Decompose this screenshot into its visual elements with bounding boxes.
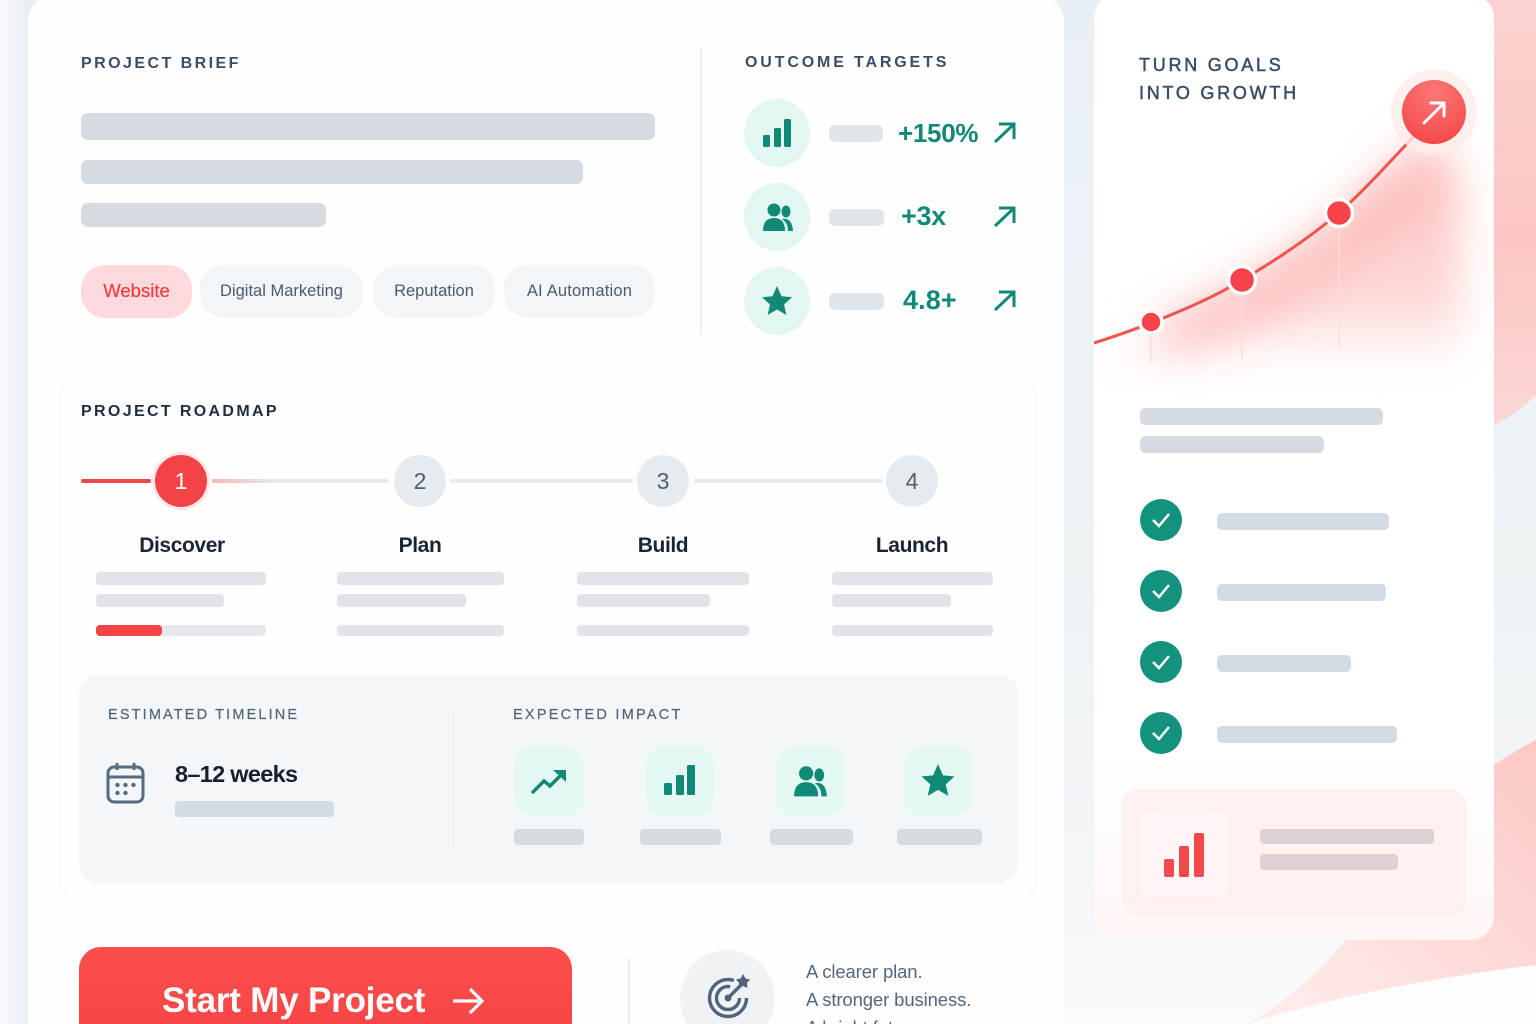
impact tile: growth — [514, 746, 584, 845]
point 1 — [1140, 311, 1162, 333]
placeholder lines — [337, 572, 504, 585]
heading: turn goals into growth — [1139, 55, 1299, 103]
target row: +150% — [744, 99, 1016, 167]
tag: Website: Website — [103, 280, 170, 301]
closing statement: A clearer plan. — [806, 961, 922, 982]
heading: outcome targets: OUTCOME TARGETS — [745, 54, 949, 71]
placeholder lines — [577, 572, 749, 585]
heading: estimated timeline: ESTIMATED TIMELINE — [108, 707, 299, 723]
progress — [96, 625, 162, 636]
icon tile — [904, 746, 972, 816]
icon: bars — [744, 99, 810, 167]
chart: growth curve — [1094, 69, 1482, 374]
icon tile — [514, 746, 584, 816]
heading: project roadmap: PROJECT ROADMAP — [81, 403, 279, 420]
step marker — [886, 455, 938, 507]
value: +3x — [901, 201, 946, 231]
tag: Reputation — [373, 265, 495, 318]
step marker — [155, 455, 207, 507]
target row: 4.8+ — [744, 267, 1016, 335]
icon: red bars — [1140, 810, 1228, 898]
tag: Digital Marketing: Digital Marketing — [220, 282, 343, 300]
value: 4.8+ — [903, 285, 957, 315]
step name: Build — [638, 534, 688, 557]
step marker — [637, 455, 689, 507]
step marker: 1 — [175, 468, 187, 494]
closing statement — [806, 961, 971, 1024]
step 1: Discover — [96, 452, 266, 636]
button label: Start My Project — [162, 981, 425, 1020]
panel: main card — [28, 0, 1064, 1024]
icon: arrow — [453, 988, 484, 1014]
tag: Reputation: Reputation — [394, 282, 474, 300]
step 2: Plan — [337, 455, 504, 636]
step 4: Launch — [832, 455, 993, 636]
check item 2 — [1140, 570, 1386, 612]
step name: Discover — [139, 534, 225, 557]
step name: Launch — [876, 534, 948, 557]
heading: expected impact: EXPECTED IMPACT — [513, 707, 683, 723]
panel: timeline and impact — [79, 675, 1018, 883]
icon tile — [776, 746, 845, 816]
check item 4 — [1140, 712, 1397, 754]
impact tile: star — [897, 746, 982, 845]
tag: AI Automation: AI Automation — [527, 282, 632, 300]
icon: arrow — [994, 206, 1016, 228]
icon: arrow — [994, 122, 1016, 144]
step 3: Build — [577, 455, 749, 636]
value: +150% — [898, 118, 978, 148]
step marker: 4 — [906, 468, 918, 494]
icon: star — [744, 267, 810, 335]
tag: Website — [81, 265, 192, 318]
heading: turn goals into growth: TURN GOALS — [1139, 55, 1284, 75]
check item 1 — [1140, 499, 1389, 541]
panel: project roadmap — [59, 372, 1037, 903]
step name: Plan — [399, 534, 441, 557]
button: start my project — [79, 947, 572, 1024]
goal marker — [1391, 69, 1477, 155]
placeholder text lines — [81, 113, 655, 227]
panel: project brief — [81, 55, 655, 227]
placeholder summary lines — [1140, 408, 1383, 453]
point 2 — [1228, 266, 1256, 294]
impact tile: bars — [640, 746, 721, 845]
checklist — [1140, 499, 1397, 754]
target row: +3x — [744, 183, 1016, 251]
icon: people — [744, 183, 810, 251]
step marker: 2 — [414, 468, 426, 494]
panel: growth card — [1094, 0, 1494, 940]
heading: turn goals into growth: INTO GROWTH — [1139, 83, 1299, 103]
placeholder lines — [832, 572, 993, 585]
icon tile — [646, 746, 714, 816]
point 3 — [1326, 200, 1352, 226]
placeholder — [175, 801, 334, 817]
check item 3 — [1140, 641, 1351, 683]
icon: arrow — [994, 290, 1016, 312]
callout: pink stat card — [1122, 789, 1466, 916]
placeholder lines — [1260, 829, 1434, 844]
heading: project brief: PROJECT BRIEF — [81, 55, 241, 72]
impact tile: people — [770, 746, 853, 845]
value: 8-12 weeks: 8–12 weeks — [175, 761, 297, 787]
roadmap connector lines — [81, 479, 883, 483]
tag: Digital Marketing — [200, 265, 363, 318]
tag: AI Automation — [504, 265, 655, 318]
icon: calendar — [106, 763, 144, 804]
step marker: 3 — [657, 468, 669, 494]
placeholder lines — [96, 572, 266, 585]
closing statement: A stronger business. — [806, 989, 971, 1010]
icon: target — [680, 950, 775, 1024]
step marker — [394, 455, 446, 507]
